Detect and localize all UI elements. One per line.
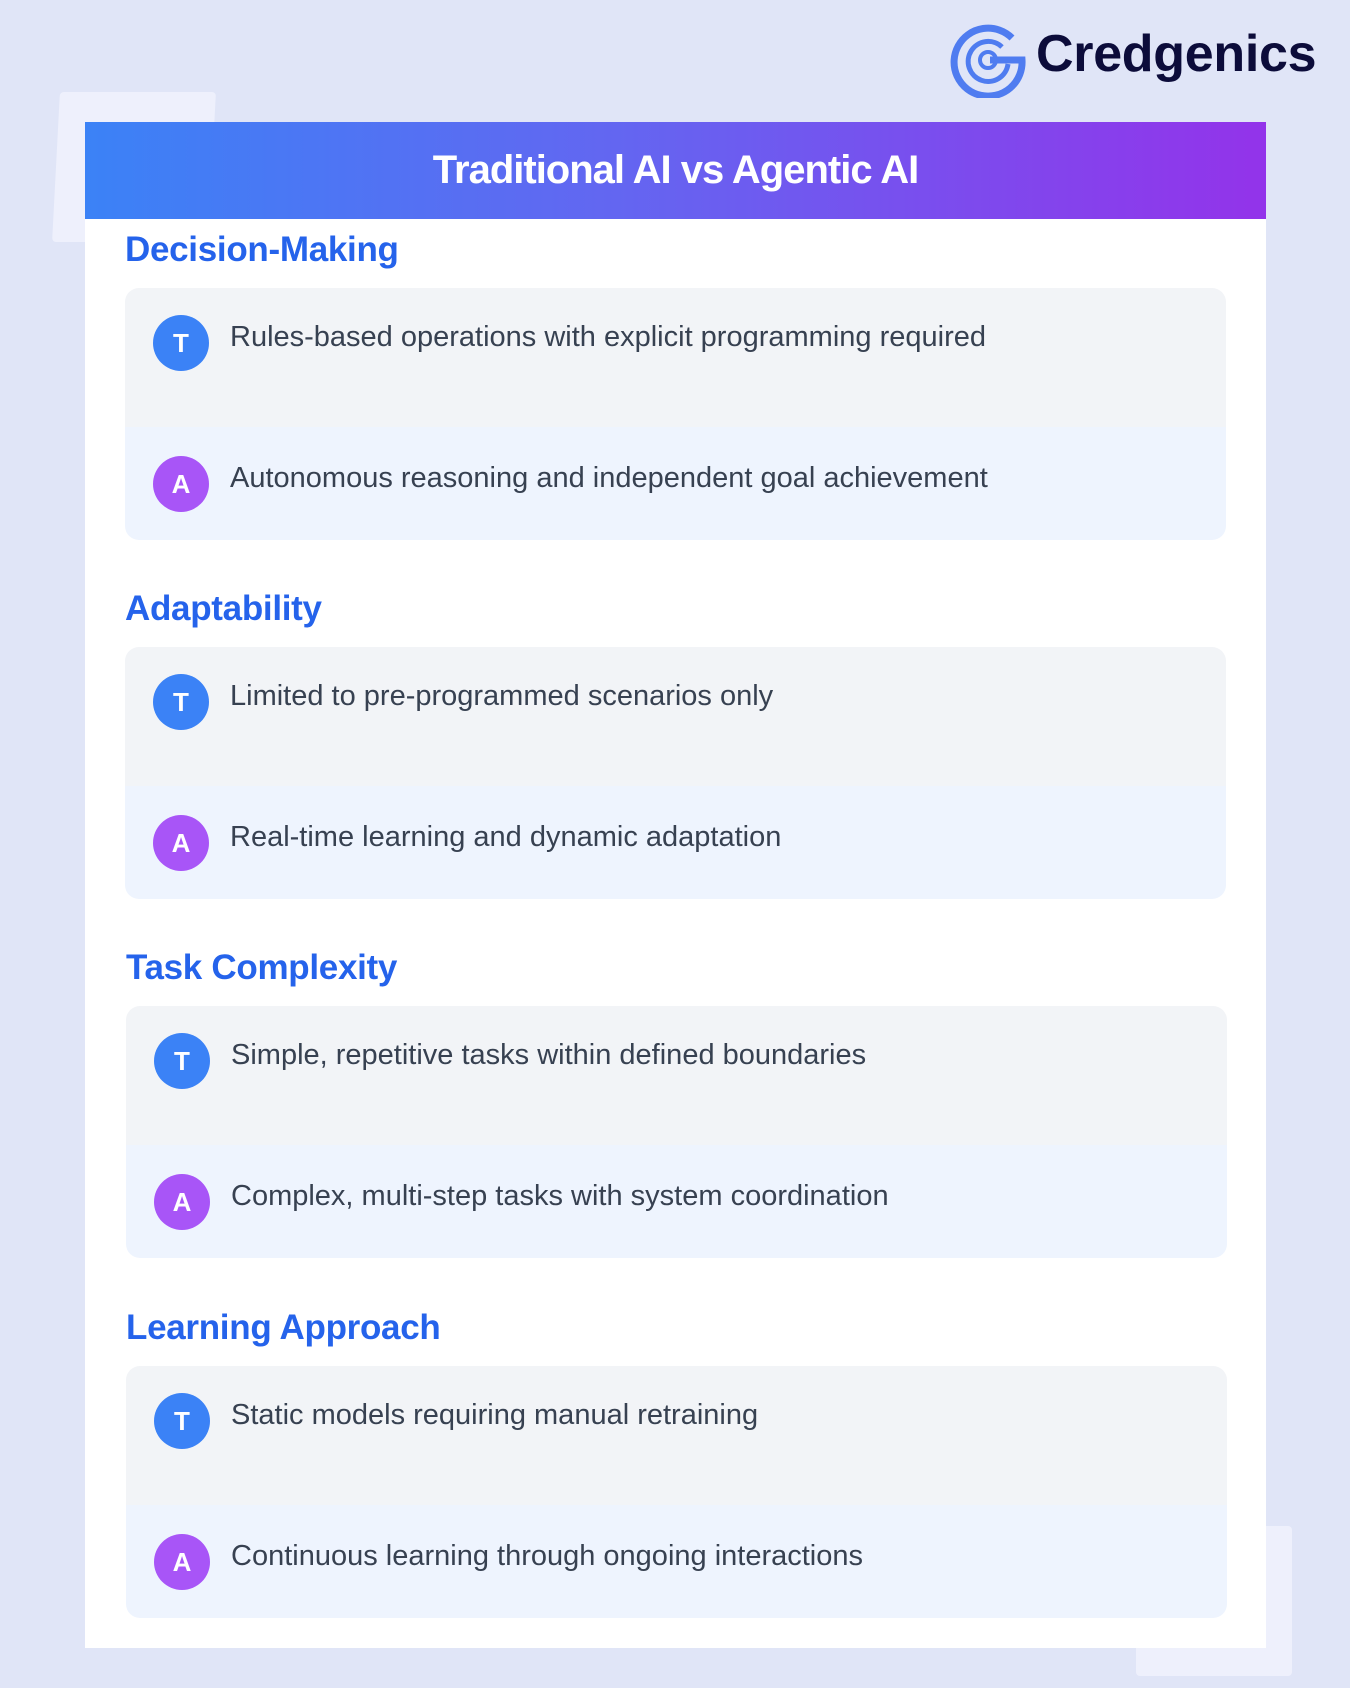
main card: Adaptability bbox=[125, 589, 322, 628]
traditional row bbox=[126, 1006, 1227, 1145]
traditional row: T bbox=[174, 1406, 190, 1436]
agentic row: Continuous learning through ongoing interactions bbox=[231, 1540, 863, 1572]
traditional row: T bbox=[174, 1046, 190, 1076]
agentic row: A bbox=[172, 469, 190, 499]
agentic row bbox=[126, 1145, 1227, 1258]
title: Traditional AI vs Agentic AI bbox=[433, 148, 918, 192]
traditional row bbox=[125, 288, 1226, 427]
title bbox=[85, 122, 1266, 219]
agentic row: A bbox=[173, 1547, 191, 1577]
traditional row bbox=[125, 647, 1226, 786]
agentic row bbox=[126, 1505, 1227, 1618]
agentic row: Real-time learning and dynamic adaptation bbox=[230, 821, 781, 853]
main card: Learning Approach bbox=[126, 1308, 440, 1347]
traditional row: Rules-based operations with explicit programming required bbox=[230, 321, 986, 353]
agentic row: A bbox=[172, 828, 190, 858]
agentic row: Autonomous reasoning and independent goal achievement bbox=[230, 462, 988, 494]
traditional row: Static models requiring manual retraining bbox=[231, 1399, 758, 1431]
main card: Decision-Making bbox=[125, 230, 399, 269]
traditional row: Simple, repetitive tasks within defined boundaries bbox=[231, 1039, 866, 1071]
panel: task complexity bbox=[126, 948, 1227, 1258]
main card bbox=[85, 122, 1266, 1648]
traditional row: Limited to pre-programmed scenarios only bbox=[230, 680, 773, 712]
agentic row: A bbox=[173, 1187, 191, 1217]
logo bbox=[950, 24, 1316, 98]
traditional row: T bbox=[173, 687, 189, 717]
agentic row: Complex, multi-step tasks with system coordination bbox=[231, 1180, 889, 1212]
panel: decision-making bbox=[125, 230, 1226, 540]
traditional row: T bbox=[173, 328, 189, 358]
main card: Task Complexity bbox=[126, 948, 397, 987]
decoration: bottom-right bbox=[1136, 1526, 1292, 1676]
agentic row bbox=[125, 786, 1226, 899]
icon: logo mark bbox=[950, 24, 1026, 98]
decoration: top-left bbox=[52, 92, 216, 242]
agentic row bbox=[125, 427, 1226, 540]
brand name: Credgenics bbox=[1036, 25, 1316, 83]
panel: adaptability bbox=[125, 589, 1226, 899]
panel: learning approach bbox=[126, 1308, 1227, 1618]
traditional row bbox=[126, 1366, 1227, 1505]
